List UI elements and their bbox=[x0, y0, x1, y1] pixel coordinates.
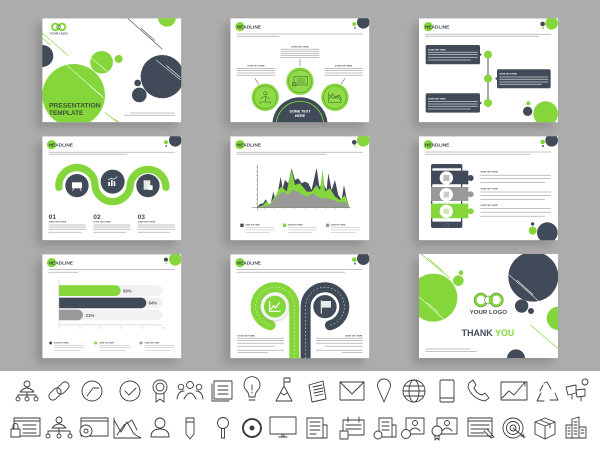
icon: parcel bbox=[535, 418, 555, 439]
legend: gray: SOME TEXT HERE bbox=[331, 225, 346, 227]
icon circle: chart bbox=[321, 84, 349, 111]
heading: HEADLINE bbox=[237, 260, 261, 265]
icon: envelope bbox=[340, 382, 364, 400]
icon: check circle bbox=[120, 381, 140, 401]
icon: monitor bbox=[270, 417, 296, 437]
title: TEMPLATE bbox=[49, 110, 84, 117]
text block: left: SOME TEXT HERE bbox=[247, 66, 265, 68]
panel: presentation template cover bbox=[42, 18, 182, 122]
step 01 text: 01 bbox=[49, 214, 56, 221]
logo: YOUR LOGO bbox=[470, 310, 508, 316]
icon: mountain flag bbox=[276, 378, 292, 401]
step 03 text: SOME TEXT HERE bbox=[138, 222, 156, 224]
semicircle callout: SOME TEXT bbox=[289, 109, 311, 113]
bar chart: 60 bbox=[121, 328, 122, 330]
step icon 1 bbox=[65, 174, 89, 198]
panel: headline with three circles bbox=[230, 18, 370, 122]
area chart bbox=[252, 164, 351, 210]
step 02 text bbox=[93, 214, 130, 232]
icon: solar panels bbox=[566, 379, 588, 401]
icon: browser edit bbox=[468, 418, 494, 438]
icon: flag bbox=[313, 295, 337, 318]
heading: HEADLINE bbox=[49, 260, 73, 265]
heading: HEADLINE bbox=[49, 142, 73, 147]
callout box 1: SOME TEXT HERE bbox=[428, 49, 446, 51]
panel: area chart bbox=[230, 134, 370, 240]
text block: right: SOME TEXT HERE bbox=[345, 335, 363, 337]
logo bbox=[470, 293, 508, 316]
text block: right: SOME TEXT HERE bbox=[335, 66, 353, 68]
text block 1: SOME TEXT HERE bbox=[480, 172, 499, 174]
panel: two roads bbox=[230, 252, 370, 360]
icon: telephone bbox=[468, 380, 489, 401]
icon: award bbox=[153, 380, 167, 402]
icon: window gear bbox=[80, 418, 108, 437]
icon: approved document bbox=[374, 418, 396, 439]
icon circle: window bbox=[286, 68, 314, 95]
heading: HEADLINE bbox=[237, 142, 261, 147]
legend: green: SOME TEXT HERE bbox=[99, 342, 115, 344]
bar chart: 80 bbox=[142, 328, 143, 330]
bar chart: 20 bbox=[79, 328, 81, 330]
step 02 text: SOME TEXT HERE bbox=[93, 222, 112, 224]
icon: tablet bbox=[440, 380, 454, 402]
panel: smartphone steps bbox=[419, 134, 558, 243]
wave ribbon bbox=[59, 168, 166, 202]
shapes: cover circles bbox=[42, 18, 182, 122]
text block 3: SOME TEXT HERE bbox=[480, 205, 499, 207]
icon: org person bbox=[16, 381, 38, 401]
thank you text: THANK YOU bbox=[462, 328, 514, 338]
icon: rising chart bbox=[261, 293, 289, 321]
icon: light bulb bbox=[244, 377, 260, 400]
logo: YOUR LOGO bbox=[50, 32, 68, 36]
icon: line chart bbox=[114, 418, 141, 438]
callout box 3: SOME TEXT HERE bbox=[428, 98, 446, 100]
icon: newspaper bbox=[307, 418, 327, 438]
shapes: closing circles bbox=[409, 252, 570, 367]
icon strip bbox=[11, 377, 588, 440]
bar chart: 23% bbox=[86, 313, 94, 318]
icon: office buildings bbox=[566, 417, 586, 438]
semicircle callout: HERE bbox=[295, 114, 306, 118]
icon: document list bbox=[212, 381, 232, 401]
bar chart: 84% bbox=[149, 301, 157, 306]
panel: bar chart bbox=[42, 253, 182, 358]
step 01 text bbox=[49, 214, 86, 232]
text block 2: SOME TEXT HERE bbox=[480, 188, 499, 190]
icon: recycle bbox=[537, 382, 558, 401]
step 03 text bbox=[138, 214, 175, 232]
panel: speech boxes timeline bbox=[419, 17, 558, 126]
heading: HEADLINE bbox=[425, 24, 449, 29]
bar chart: 59% bbox=[123, 289, 132, 294]
bar chart: 100 bbox=[162, 328, 164, 330]
step 02 text: 02 bbox=[93, 214, 101, 221]
panel: wave with three steps bbox=[42, 134, 182, 240]
bar chart: 0 bbox=[59, 328, 60, 330]
phone graphic bbox=[431, 164, 474, 228]
icon: pencil bbox=[186, 418, 194, 439]
icon: locked window bbox=[11, 418, 40, 437]
bar chart bbox=[59, 280, 164, 330]
icon: gauge bbox=[82, 381, 102, 401]
icon: globe bbox=[403, 380, 425, 402]
title: PRESENTATION bbox=[49, 103, 101, 110]
step 03 text: 03 bbox=[138, 214, 145, 221]
legend: dark: SOME TEXT HERE bbox=[54, 342, 69, 344]
icon: team bbox=[177, 382, 203, 399]
heading: HEADLINE bbox=[425, 142, 449, 147]
step 01 text: SOME TEXT HERE bbox=[49, 222, 67, 224]
icon: hierarchy bbox=[46, 417, 72, 438]
icon: gear bbox=[243, 419, 261, 437]
title bbox=[49, 103, 100, 115]
dark road bbox=[306, 287, 344, 360]
step icon 2 bbox=[100, 169, 125, 194]
icon: magnifier bbox=[218, 418, 228, 438]
icon: trend chart bbox=[501, 382, 527, 400]
icon strip background bbox=[0, 371, 600, 450]
logo bbox=[50, 24, 68, 36]
callout box 2: SOME TEXT HERE bbox=[499, 74, 518, 76]
icon: map pin bbox=[378, 379, 390, 402]
icon circle: network bbox=[252, 84, 279, 111]
icon: calendar bbox=[340, 417, 364, 439]
legend: dark: SOME TEXT HERE bbox=[245, 225, 261, 227]
timeline bbox=[484, 51, 492, 107]
icon: target bbox=[503, 418, 525, 438]
icon: user bbox=[151, 418, 169, 437]
icon: profile award bbox=[432, 418, 457, 440]
legend: gray: SOME TEXT HERE bbox=[145, 342, 160, 344]
text block: left: SOME TEXT HERE bbox=[237, 335, 256, 337]
icon: chain link bbox=[47, 380, 71, 402]
bar chart: 40 bbox=[100, 328, 102, 330]
legend: green: SOME TEXT HERE bbox=[288, 225, 303, 227]
icon: profile link bbox=[402, 418, 424, 438]
panel: thank you bbox=[409, 252, 570, 367]
step icon 3 bbox=[135, 173, 161, 198]
text block: centre: SOME TEXT HERE bbox=[291, 46, 309, 48]
green road bbox=[256, 287, 294, 360]
heading: HEADLINE bbox=[237, 24, 261, 29]
icon: document pile bbox=[309, 381, 326, 402]
semicircle callout bbox=[272, 97, 328, 122]
